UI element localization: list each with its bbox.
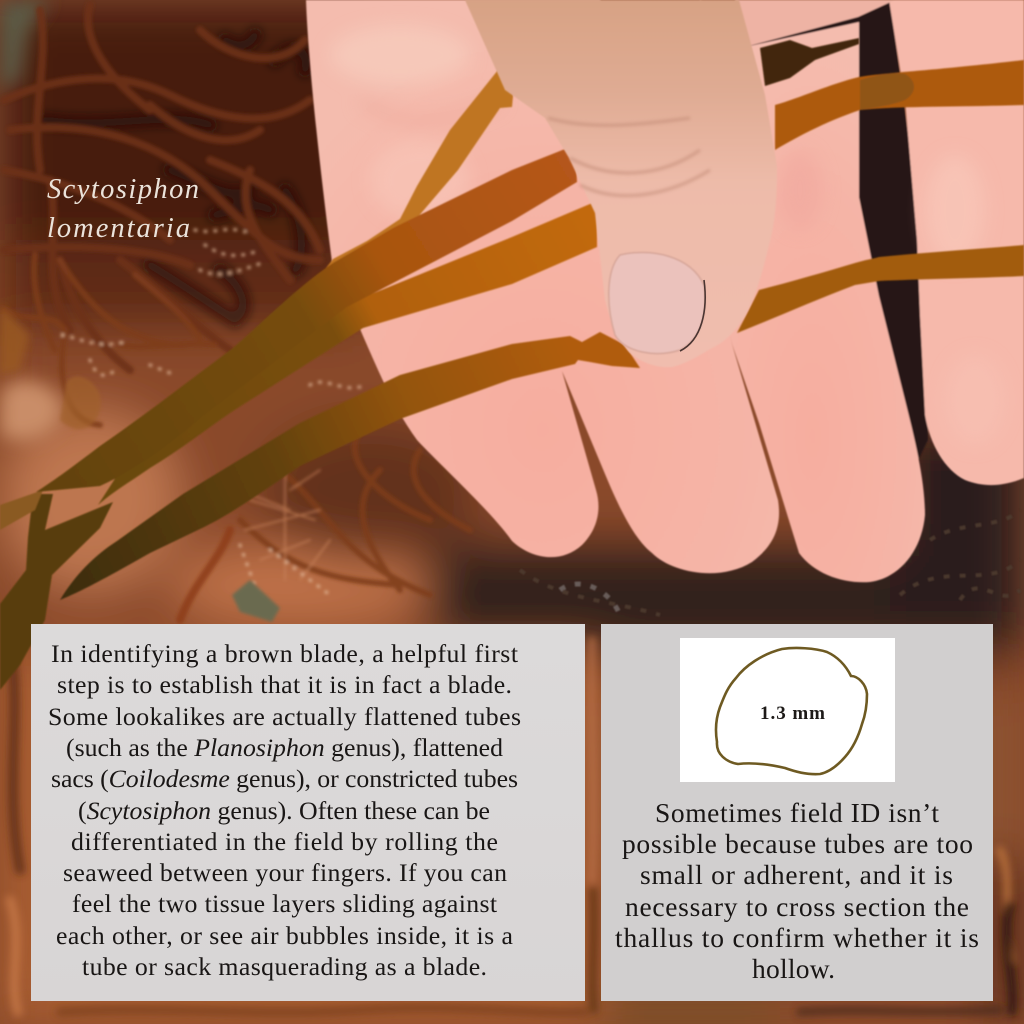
speckled highlights — [62, 229, 365, 600]
rock details: pale algae crust and kelp fronds — [0, 305, 280, 622]
thallus outline — [716, 648, 867, 774]
seaweed strands behind the hand — [4, 5, 470, 620]
note text: possible because tubes are too — [622, 828, 973, 859]
body text: tube or sack masquerading as a blade. — [82, 952, 487, 981]
finger: first and second merged base — [306, 0, 779, 573]
blade B — [98, 201, 597, 505]
finger: third — [700, 0, 925, 582]
body text: sacs (Coilodesme genus), or constricted tubes — [51, 764, 518, 793]
top of palm — [735, 0, 895, 47]
note text: small or adherent, and it is — [640, 859, 953, 890]
hand: palm and four fingers — [306, 0, 1024, 582]
dark gap between fingers — [745, 0, 928, 560]
blade segment upper right — [775, 60, 1024, 150]
panel: blade identification — [31, 624, 585, 1001]
seaweed: left blades — [0, 55, 640, 690]
cross-section image — [680, 638, 895, 782]
thumb crease — [548, 118, 710, 196]
finger: fourth — [889, 0, 1024, 485]
body text: In identifying a brown blade, a helpful first — [51, 639, 519, 668]
nail edge shadow — [680, 280, 705, 351]
species label — [47, 174, 199, 244]
blade: lower stems — [0, 494, 113, 690]
thin dark strand top right — [760, 38, 859, 86]
thumbnail — [609, 253, 705, 354]
body text: feel the two tissue layers sliding against — [72, 889, 498, 918]
body text: (Scytosiphon genus). Often these can be — [78, 796, 490, 825]
species label: Scytosiphon — [47, 174, 199, 205]
blade C — [60, 332, 640, 600]
frame texture around panels — [10, 640, 1013, 1012]
body text: differentiated in the field by rolling the — [71, 827, 498, 856]
body text: each other, or see air bubbles inside, it is a — [56, 921, 514, 950]
blade A — [36, 145, 577, 492]
body text: Some lookalikes are actually flattened tubes — [48, 702, 521, 731]
note text: necessary to cross section the — [625, 891, 969, 922]
body text: seaweed between your fingers. If you can — [63, 858, 507, 887]
body text: (such as the Planosiphon genus), flattened — [66, 733, 503, 762]
thin strand — [318, 55, 516, 285]
panel: cross section note — [601, 624, 993, 1001]
seaweed: right-hand blade segments — [737, 38, 1024, 333]
note text: hollow. — [752, 953, 835, 984]
note text — [615, 797, 979, 984]
note text: thallus to confirm whether it is — [615, 922, 979, 953]
lower right dark seaweed texture — [520, 510, 1020, 615]
measurement label: 1.3 mm — [760, 703, 825, 724]
body text — [48, 639, 521, 981]
body text: step is to establish that it is in fact a blade. — [57, 670, 512, 699]
hand: thumb over the blades — [465, 0, 777, 367]
finger shading highlights — [330, 25, 1005, 445]
grey-green corner — [0, 0, 50, 90]
blade segment lower right — [737, 245, 1024, 333]
note text: Sometimes field ID isn’t — [655, 797, 939, 828]
species label: lomentaria — [47, 213, 190, 244]
